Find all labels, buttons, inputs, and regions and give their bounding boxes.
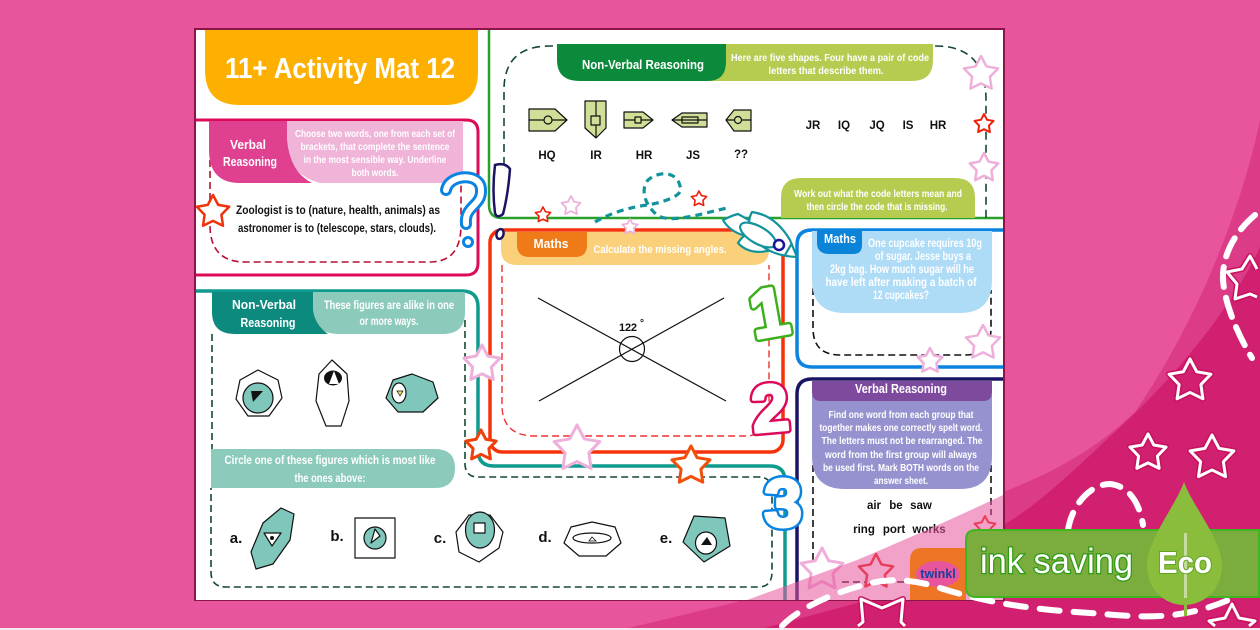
header: maths word problem: 12 cupcakes? xyxy=(873,290,929,302)
header: non-verbal reasoning: Non-Verbal Reasoning xyxy=(582,57,704,72)
panel: maths angles xyxy=(490,230,783,452)
callout: code instruction xyxy=(781,178,975,218)
word groups: port xyxy=(883,524,905,536)
code options: HR xyxy=(930,120,947,132)
header: verbal reasoning instructions: Verbal Reasoning xyxy=(855,382,947,396)
white dashed trails xyxy=(782,215,1255,626)
header: maths word problem: 2kg bag. How much sugar will he xyxy=(830,264,974,276)
code options: JR xyxy=(806,120,821,132)
word groups: works xyxy=(911,524,946,536)
ink saving banner: ink saving xyxy=(980,542,1133,581)
analogy sentence xyxy=(236,203,440,235)
icon: eco leaf: Eco xyxy=(1158,545,1212,580)
header: non-verbal reasoning xyxy=(212,292,465,334)
star: pink on maths panel xyxy=(622,219,638,233)
word groups: saw xyxy=(910,500,932,512)
header: maths word problem: of sugar. Jesse buys a xyxy=(875,251,971,263)
callout: code instruction: Work out what the code letters mean and xyxy=(794,188,962,200)
number 2: 2 xyxy=(748,370,792,446)
star: red bottom xyxy=(859,554,893,587)
star: white small xyxy=(1130,434,1166,468)
icon: eco leaf xyxy=(1147,482,1222,616)
white stars on background xyxy=(858,256,1257,626)
angle diagram: ° xyxy=(640,318,644,329)
panel: top non-verbal reasoning xyxy=(489,30,1003,218)
example figures xyxy=(236,360,438,426)
title banner: 11+ Activity Mat 12 xyxy=(225,53,455,85)
header: verbal reasoning: Choose two words, one from each set of xyxy=(295,128,455,140)
header: non-verbal reasoning: Here are five shapes. Four have a pair of code xyxy=(731,52,929,64)
icon: exclamation mark xyxy=(494,164,510,240)
header: verbal reasoning instructions: Find one word from each group that xyxy=(828,409,974,421)
star: red bottom right xyxy=(975,516,995,536)
header: verbal reasoning: brackets, that complete the sentence xyxy=(300,141,450,153)
header: verbal reasoning: in the most sensible way. Underline xyxy=(304,154,447,166)
header: non-verbal reasoning xyxy=(557,44,933,81)
number 2: 2 xyxy=(748,370,792,446)
rocket trail xyxy=(595,174,727,222)
shape labels xyxy=(538,149,748,162)
title banner xyxy=(205,30,478,105)
answer figures: d. xyxy=(538,529,552,546)
twinkl logo xyxy=(910,548,966,600)
star: white right edge xyxy=(1227,256,1257,299)
analogy sentence: Zoologist is to (nature, health, animals) as xyxy=(236,203,440,217)
panel: verbal reasoning analogy xyxy=(196,120,478,275)
number 1: 1 xyxy=(744,272,794,354)
paper sheet xyxy=(194,28,1005,601)
angle diagram: 122 xyxy=(619,322,637,334)
number 1: 1 xyxy=(744,272,794,354)
header: verbal reasoning instructions xyxy=(812,381,992,489)
panel: verbal reasoning words xyxy=(797,379,1003,600)
code options xyxy=(806,120,947,132)
number 3: 3 xyxy=(764,465,802,541)
header: maths: Maths xyxy=(534,236,568,251)
star: red centre small xyxy=(535,207,551,221)
header: verbal reasoning instructions: answer sheet. xyxy=(874,475,928,487)
angle diagram xyxy=(538,298,726,401)
star: pink cupcake large xyxy=(966,325,1000,358)
word groups: air xyxy=(867,500,882,512)
code options: IQ xyxy=(838,120,850,132)
header: verbal reasoning: both words. xyxy=(352,167,399,179)
header: verbal reasoning instructions: together makes one correctly spelt word. xyxy=(820,422,983,434)
answer figures: a. xyxy=(230,530,242,547)
header: maths word problem: have left after making a batch of xyxy=(826,277,977,289)
star: pink centre small xyxy=(561,196,581,214)
callout: circle one figure: Circle one of these figures which is most like xyxy=(224,453,436,467)
header: maths xyxy=(501,232,769,265)
header: verbal reasoning: Reasoning xyxy=(223,154,277,169)
header: non-verbal reasoning: Reasoning xyxy=(240,315,296,330)
shape labels: JS xyxy=(686,150,700,162)
answer figures: c. xyxy=(434,530,446,547)
header: verbal reasoning instructions: The letters must not be rearranged. The xyxy=(822,435,983,447)
star: white upper xyxy=(1169,359,1211,399)
corner overlay xyxy=(747,495,1003,600)
ink saving banner xyxy=(966,482,1259,616)
shape labels: ?? xyxy=(734,149,748,161)
star: white bottom left xyxy=(858,599,905,626)
decorative stars xyxy=(197,56,1000,588)
header: non-verbal reasoning: These figures are alike in one xyxy=(324,300,454,312)
star: orange left of maths xyxy=(466,430,496,459)
star: pink left of maths xyxy=(464,345,500,379)
panel: maths cupcakes xyxy=(797,230,1003,367)
callout: circle one figure xyxy=(211,449,455,488)
star: pink top right xyxy=(964,56,998,89)
word groups: be xyxy=(889,500,903,512)
header: maths word problem xyxy=(812,231,992,313)
shape labels: HQ xyxy=(538,150,556,162)
star: pink cupcake small xyxy=(918,348,942,372)
answer figures: b. xyxy=(330,528,344,545)
star: pink below maths xyxy=(554,425,600,468)
header: maths word problem: Maths xyxy=(824,232,856,246)
code shapes xyxy=(529,101,751,138)
analogy sentence: astronomer is to (telescope, stars, clouds). xyxy=(238,221,436,235)
shape labels: HR xyxy=(636,150,653,162)
number 3: 3 xyxy=(764,465,802,541)
star: orange below maths xyxy=(672,446,710,482)
star: pink bottom xyxy=(801,548,843,588)
icon: rocket xyxy=(723,212,797,257)
code options: JQ xyxy=(869,120,885,132)
callout: code instruction: then circle the code that is missing. xyxy=(806,201,948,213)
shape labels: IR xyxy=(590,150,602,162)
header: non-verbal reasoning: or more ways. xyxy=(360,316,418,328)
star: red left xyxy=(197,195,229,226)
header: maths: Calculate the missing angles. xyxy=(594,244,726,256)
header: verbal reasoning instructions: be used first. Mark BOTH words on the xyxy=(823,462,979,474)
star: red top right xyxy=(974,114,994,132)
icon: question mark xyxy=(446,177,481,246)
answer figures: e. xyxy=(660,530,672,547)
star: pink right xyxy=(970,153,998,180)
star: red near trail xyxy=(691,191,707,205)
panel: non-verbal figures xyxy=(196,291,785,600)
header: verbal reasoning instructions: word from the first group will always xyxy=(824,449,977,461)
header: verbal reasoning xyxy=(209,121,463,183)
star: white medium xyxy=(1190,435,1234,477)
header: non-verbal reasoning: letters that describe them. xyxy=(768,65,884,77)
twinkl logo: twinkl xyxy=(920,567,956,581)
header: verbal reasoning: Verbal xyxy=(230,137,266,152)
header: maths word problem: One cupcake requires 10g xyxy=(868,238,982,250)
header: non-verbal reasoning: Non-Verbal xyxy=(232,297,296,312)
word groups xyxy=(853,500,946,536)
word groups: ring xyxy=(853,524,875,536)
star: white bottom right xyxy=(1209,604,1255,626)
answer figures xyxy=(230,508,730,569)
callout: circle one figure: the ones above: xyxy=(294,471,366,485)
code options: IS xyxy=(903,120,914,132)
